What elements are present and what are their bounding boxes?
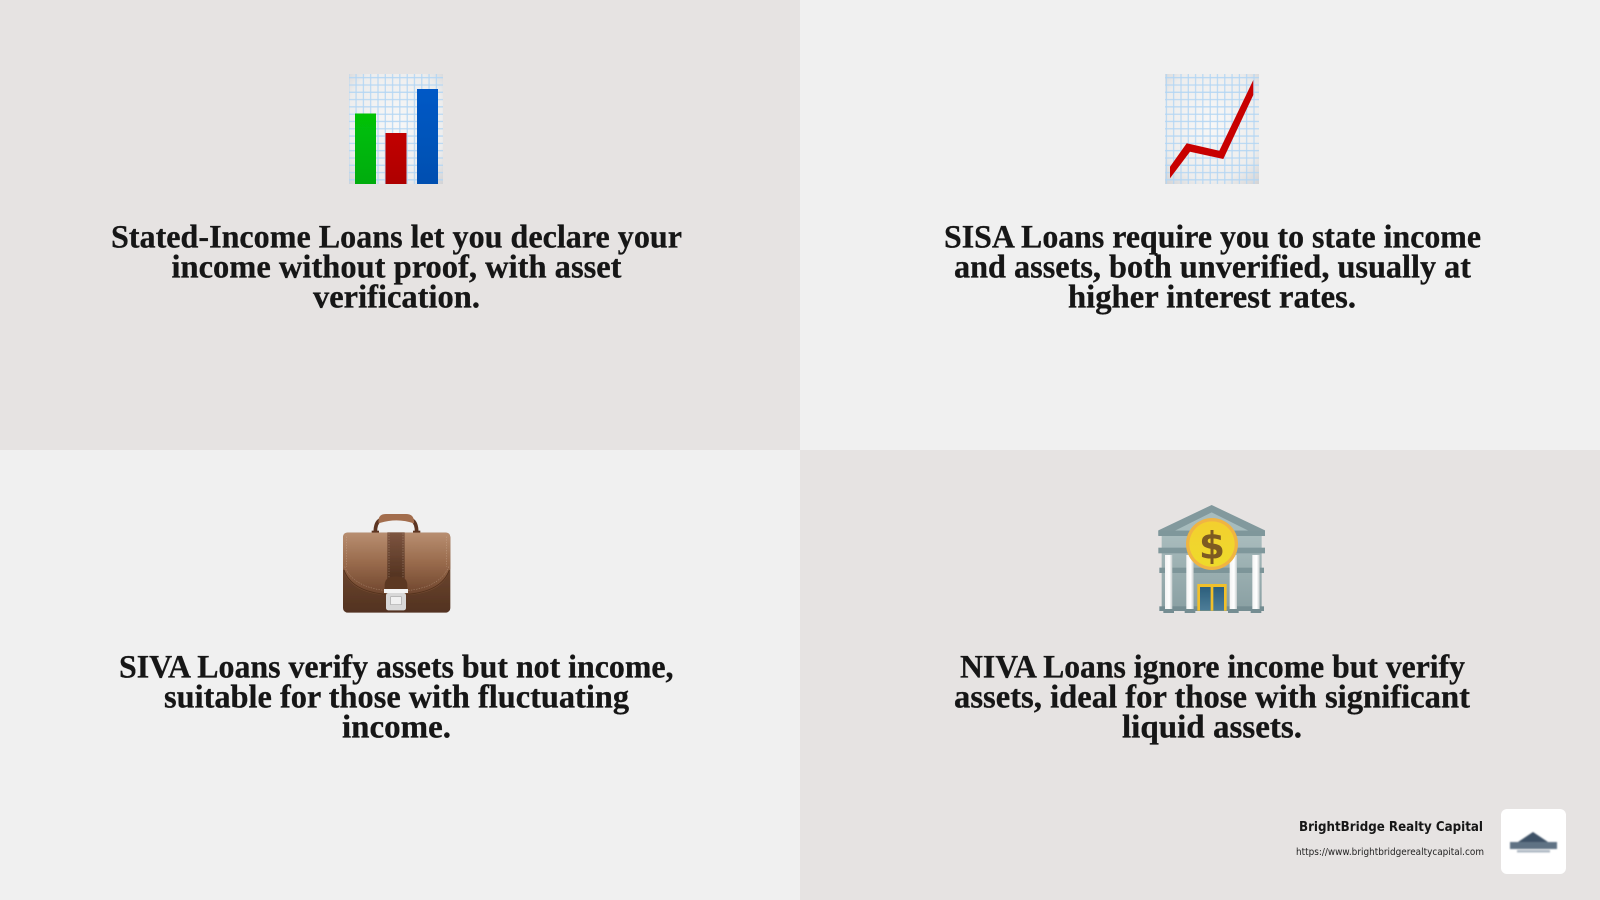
heading: SISA text: [944, 220, 1481, 316]
icon: briefcase: [343, 514, 450, 613]
heading: NIVA text: assets, ideal for those with significant: [954, 680, 1470, 716]
brand name: BrightBridge Realty Capital: [1299, 820, 1483, 835]
heading: stated-income text: [111, 220, 682, 316]
heading: stated-income text: income without proof, with asset: [172, 250, 622, 286]
panel: stated-income loans: [0, 0, 800, 450]
heading: NIVA text: liquid assets.: [1122, 710, 1302, 746]
footer brand: [1296, 809, 1566, 874]
icon: line chart: [1165, 74, 1259, 184]
logo: [1501, 809, 1566, 874]
panel: SISA loans: [800, 0, 1600, 450]
panel: SIVA loans: [0, 450, 800, 900]
heading: SIVA text: SIVA Loans verify assets but not income,: [119, 650, 674, 686]
heading: SIVA text: suitable for those with fluctuating: [164, 680, 629, 716]
heading: stated-income text: verification.: [313, 280, 480, 316]
panel: NIVA loans: [800, 450, 1600, 900]
heading: SISA text: SISA Loans require you to state income: [944, 220, 1481, 256]
heading: SISA text: higher interest rates.: [1068, 280, 1356, 316]
icon: bank: [1158, 505, 1265, 613]
icon: bank: $: [1199, 523, 1225, 567]
heading: SIVA text: [119, 650, 674, 746]
heading: NIVA text: [954, 650, 1470, 746]
heading: NIVA text: NIVA Loans ignore income but verify: [960, 650, 1465, 686]
icon: bar chart: [349, 74, 443, 184]
website url: https://www.brightbridgerealtycapital.com: [1296, 847, 1484, 858]
heading: SIVA text: income.: [342, 710, 451, 746]
heading: SISA text: and assets, both unverified, usually at: [954, 250, 1471, 286]
heading: stated-income text: Stated-Income Loans let you declare your: [111, 220, 682, 256]
